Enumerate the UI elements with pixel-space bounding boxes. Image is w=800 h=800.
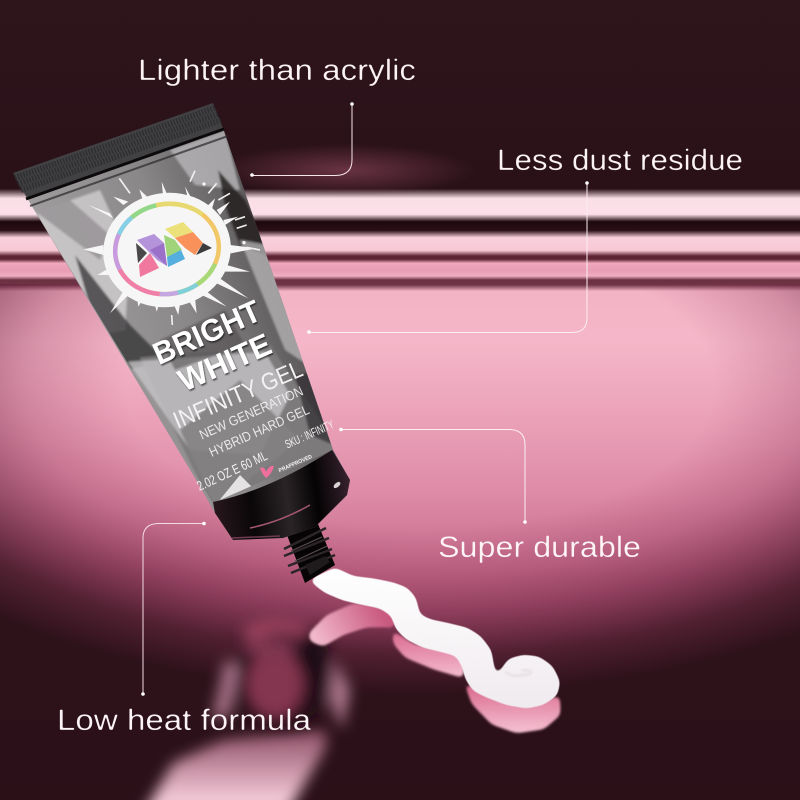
tube <box>13 103 350 583</box>
product line text: SKU : INFINITY <box>283 417 336 451</box>
callout: lighter than acrylic: Lighter than acrylic <box>138 54 416 87</box>
product line text <box>169 356 336 494</box>
product name <box>148 293 277 398</box>
product name: BRIGHT <box>148 293 266 372</box>
rainbow ring <box>108 196 226 302</box>
tube body <box>27 128 350 540</box>
paste squeezed out of the nozzle <box>308 567 560 709</box>
callout: less dust residue: Less dust residue <box>497 144 743 177</box>
product line text: NEW GENERATION <box>197 383 305 443</box>
product line text: INFINITY GEL <box>169 356 307 434</box>
icon: pink heart mark <box>260 466 274 478</box>
brand logo mark <box>136 222 212 277</box>
callout: less dust residue <box>307 144 743 334</box>
product name: WHITE <box>173 326 277 398</box>
reflection of tube and paste on the surface <box>143 603 561 800</box>
callout: super durable <box>339 428 641 564</box>
product line text: 2.02 OZ E 60 ML <box>194 448 270 494</box>
nozzle <box>284 524 335 583</box>
reflection under paste <box>308 603 561 733</box>
callout: super durable: Super durable <box>438 531 641 564</box>
product line text: HYBRID HARD GEL <box>207 402 312 460</box>
callout: low heat formula: Low heat formula <box>57 704 311 737</box>
callout: lighter than acrylic <box>138 54 416 177</box>
label facets <box>36 130 345 510</box>
product line text: PRAPPROVED <box>278 454 313 474</box>
black lower end of tube <box>213 450 350 540</box>
splash logo background <box>83 171 260 325</box>
cap <box>13 103 228 206</box>
callout: low heat formula <box>57 522 311 737</box>
